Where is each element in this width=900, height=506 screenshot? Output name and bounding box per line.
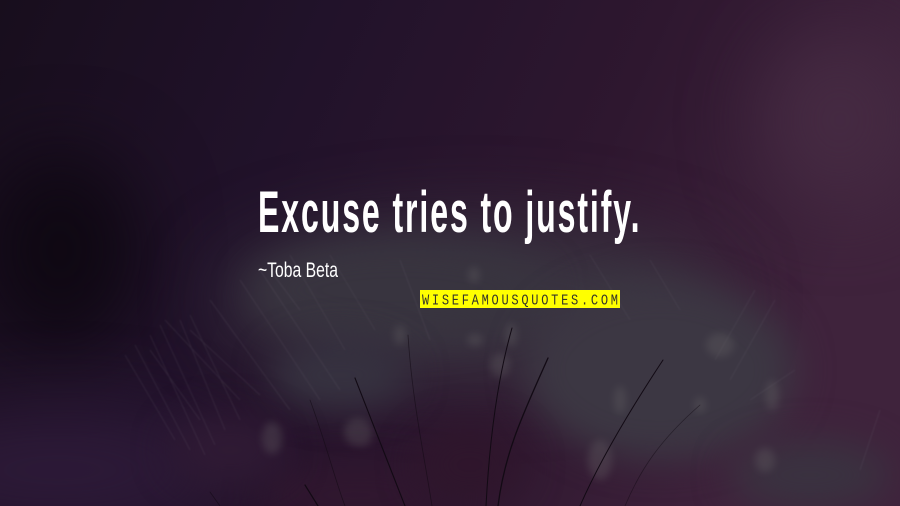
quote text: Excuse tries to justify.	[258, 180, 640, 244]
misty seed head	[170, 225, 890, 506]
dandelion stems	[210, 328, 700, 506]
wisefamousquotes logo: WISEFAMOUSQUOTES.COM	[422, 293, 618, 310]
water droplets	[262, 267, 779, 480]
feather strands	[125, 255, 880, 470]
attribution: ~Toba Beta	[258, 259, 338, 282]
